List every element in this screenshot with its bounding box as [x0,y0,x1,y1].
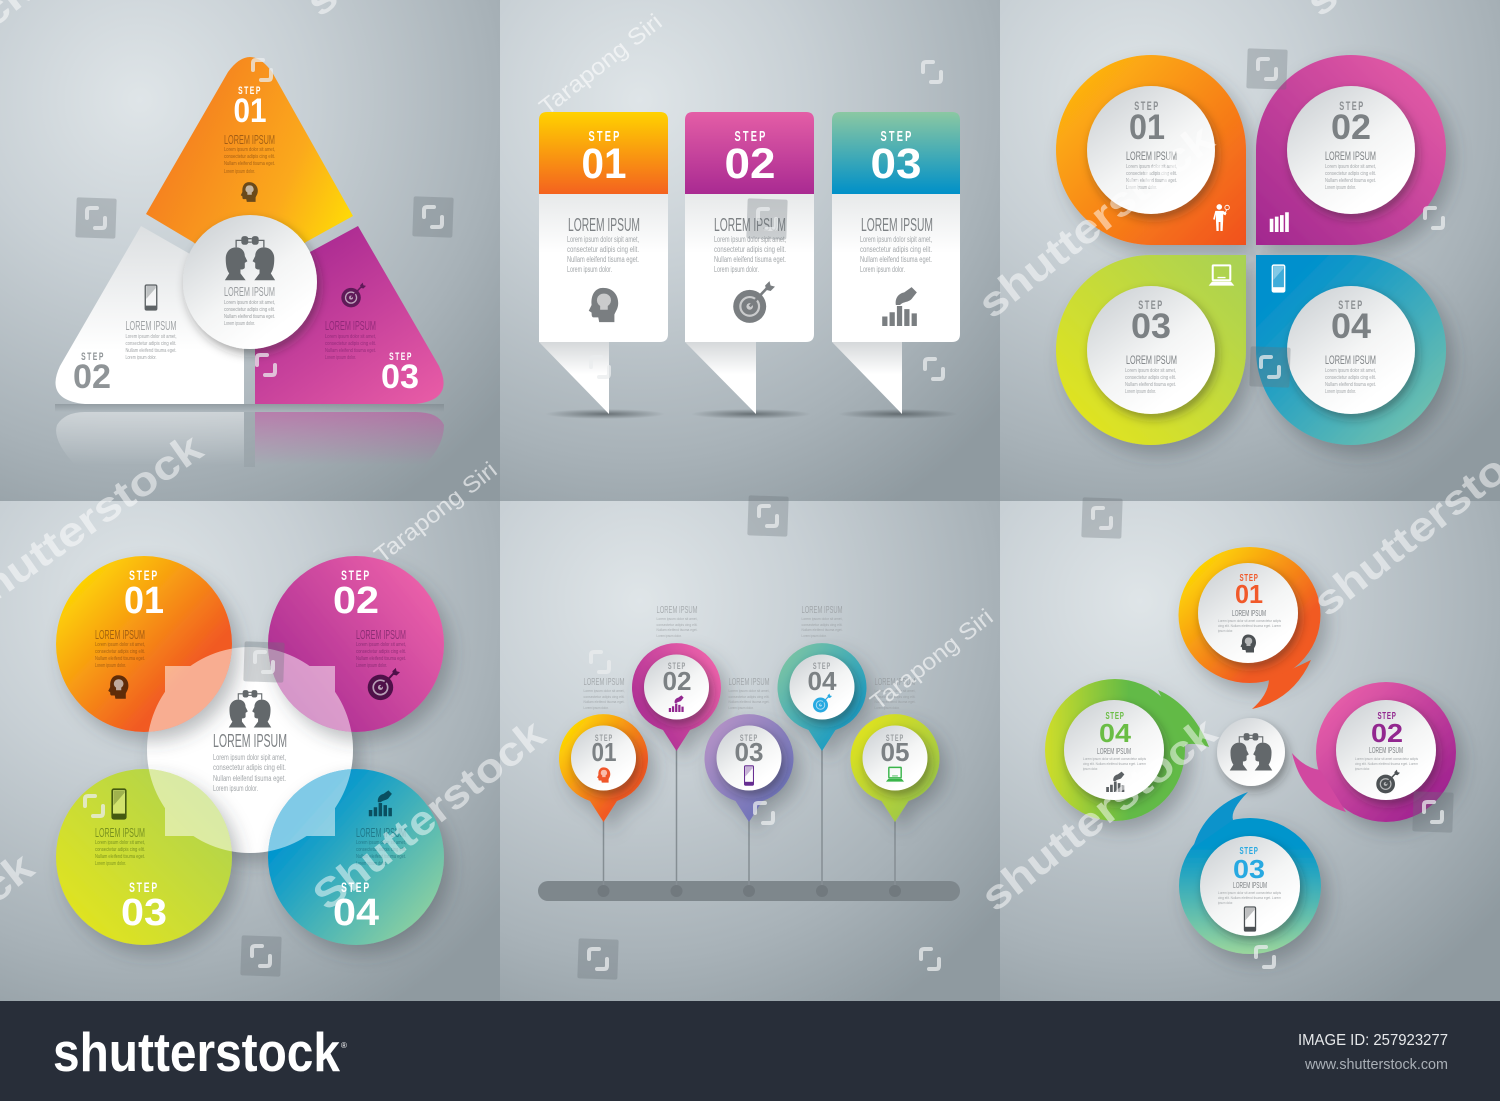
icon: head with bulb [241,182,258,202]
teardrop 01: STEP [1134,100,1160,114]
card 2: consectetur adipis cing elit. [714,245,786,254]
pin 03: Lorem ipsum dolor. [728,705,754,710]
pin 05: Lorem ipsum dolor sit amet, [874,688,916,693]
pin 01: Lorem ipsum dolor. [584,705,608,710]
step 01 label: 01 [234,92,266,130]
watermarks: Tarapong Siri [534,8,667,120]
step 01 text: LOREM IPSUM [95,627,145,642]
center text: Nullam eleifend tisuma eget. [224,314,275,320]
center icon and text: Nullam eleifend tisuma eget. [213,774,286,783]
card 2 [685,112,814,419]
pin 02: STEP [668,661,686,671]
step 03 text: Lorem ipsum dolor sit amet, [325,334,376,340]
step 03 text: Nullam eleifend tisuma eget. [95,854,145,860]
step 01 text: Lorem ipsum dolor sit amet, [224,147,275,153]
card 2: Lorem ipsum dolor sipit amet, [714,235,786,244]
pin 02: Nullam eleifend tisuma eget. [656,627,698,632]
center circle with heads icon [1217,718,1285,786]
bubble 03 [1179,792,1321,954]
step 01 text: 01 [124,580,164,622]
step 02 text: 02 [333,580,379,622]
teardrop 03: 03 [1131,307,1171,346]
step 04 text [333,790,406,934]
step 01 label: STEP [238,84,262,96]
pin 04 [778,605,866,751]
website: www.shutterstock.com [1304,1057,1448,1073]
teardrop 02: Lorem ipsum dolor. [1325,185,1356,191]
translucent overlap [147,647,353,853]
step 02 text: STEP [341,568,371,584]
pin 05: LOREM IPSUM [874,677,916,688]
pin 04: STEP [813,661,831,671]
pin 02: consectetur adipis cing elit. [656,622,698,627]
step 01 text [224,132,275,175]
bubble 03: STEP [1239,844,1259,856]
pin 04: consectetur adipis cing elit. [802,622,842,627]
teardrop 04: 04 [1331,307,1372,346]
step 04 text: Lorem ipsum dolor. [356,861,387,867]
step 01 text: Nullam eleifend tisuma eget. [224,161,275,167]
pin 05: STEP [886,733,904,743]
pin 04: Lorem ipsum dolor. [802,633,826,638]
step 04 text: Lorem ipsum dolor sit amet, [356,840,406,846]
teardrop 02: Nullam eleifend tisuma eget. [1325,178,1376,184]
card 1: Lorem ipsum dolor sipit amet, [567,235,639,244]
teardrop 02: 02 [1331,108,1371,147]
pin 03: STEP [740,733,758,743]
bubble 03: LOREM IPSUM [1233,880,1267,890]
step 01 text: consectetur adipis cing elit. [95,649,145,655]
card 3: 03 [870,140,922,188]
step 01 text: Lorem ipsum dolor sit amet, [95,642,145,648]
panel: triangle infographic [55,57,444,467]
pin 02 [632,605,721,751]
card 1: consectetur adipis cing elit. [567,245,639,254]
teardrop 01: consectetur adipis cing elit. [1126,171,1177,177]
panel: banner cards [539,112,960,419]
bubble 02 [1292,682,1456,822]
pin 02: Lorem ipsum dolor. [656,633,682,638]
teardrop 04: Nullam eleifend tisuma eget. [1325,382,1376,388]
pin 04: 04 [808,666,837,696]
pin 05: 05 [880,737,910,767]
bubble 03: 03 [1233,854,1265,884]
bubble 04: 04 [1099,718,1132,748]
bubble 01 [1178,547,1320,709]
pin 02: LOREM IPSUM [656,605,698,616]
watermarks: shutterstock [969,115,1222,327]
pin 05: consectetur adipis cing elit. [874,694,916,699]
bubble 04: Lorem ipsum dolor sit amet consectetur adipis [1083,757,1146,761]
center text [224,284,275,327]
step 02 text: Nullam eleifend tisuma eget. [126,348,176,354]
card 3: LOREM IPSUM [861,215,933,235]
watermarks: Tarapong Siri [369,456,502,568]
step 04 text: consectetur adipis cing elit. [356,847,406,853]
bubble 04 [1045,679,1209,821]
bubble 02: Lorem ipsum dolor sit amet consectetur adipis [1355,757,1418,761]
card 1 [539,112,668,419]
circle 04 [268,769,444,945]
card 3 [832,112,960,419]
image id: IMAGE ID: 257923277 [1298,1032,1448,1049]
registered mark: ® [341,1041,347,1050]
step 03 text: consectetur adipis cing elit. [95,847,145,853]
step 02 text: LOREM IPSUM [356,627,406,642]
bubble 02: ipsum dolor. [1355,767,1370,771]
pin 01: Nullam eleifend tisuma eget. [584,699,624,704]
pin 05: Lorem ipsum dolor. [874,705,900,710]
step 03 text [95,789,167,934]
step 01 text: Lorem ipsum dolor. [224,169,255,175]
card 2: LOREM IPSUM [714,215,786,235]
center circle [183,215,317,349]
timeline bar [538,748,960,901]
step 04 text: LOREM IPSUM [356,825,406,840]
step 01 text [95,568,164,699]
center icon and text: Lorem ipsum dolor. [213,784,258,793]
teardrop 02: consectetur adipis cing elit. [1325,171,1376,177]
pin 01 [559,677,648,822]
center text: Lorem ipsum dolor sit amet, [224,300,275,306]
pin 03: LOREM IPSUM [728,677,770,688]
step 03 label: 03 [381,358,419,396]
panel: overlapping circles [56,556,444,945]
step 03 text: Nullam eleifend tisuma eget. [325,348,376,354]
card 2: STEP [735,128,767,145]
card 2: Nullam eleifend tisuma eget. [714,255,786,264]
teardrop 02: STEP [1339,100,1365,114]
step 02 label: 02 [73,358,111,396]
pin 03: Lorem ipsum dolor sit amet, [728,688,770,693]
card 1: LOREM IPSUM [568,215,640,235]
teardrop 01: Lorem ipsum dolor sit amet, [1126,164,1177,170]
pin 02: Lorem ipsum dolor sit amet, [656,616,698,621]
panel: teardrops [1056,55,1446,445]
bubble 03: Lorem ipsum dolor sit amet consectetur adipis [1218,891,1281,895]
pin 02: 02 [662,666,692,696]
step 03 text: Lorem ipsum dolor sit amet, [95,840,145,846]
panel: pin timeline [538,605,960,901]
card 2: 02 [724,140,776,188]
teardrop 03: STEP [1138,299,1164,313]
pin 04: LOREM IPSUM [802,605,842,616]
step 03 text: STEP [129,880,159,896]
step 02 text: Lorem ipsum dolor. [126,355,156,361]
teardrop 02: LOREM IPSUM [1325,149,1376,163]
teardrop 04: LOREM IPSUM [1325,353,1376,367]
card 3: consectetur adipis cing elit. [860,245,932,254]
bubble 01: 01 [1235,579,1263,609]
teardrop 04: consectetur adipis cing elit. [1325,375,1376,381]
bubble 03: cing elit. Nullam eleifend tisuma eget. Lorem [1218,896,1281,900]
footer logo: shutterstock [53,1021,340,1083]
step 02 text: Nullam eleifend tisuma eget. [356,656,406,662]
pin 03: 03 [734,737,764,767]
pin 03 [704,677,794,822]
step 03 text: consectetur adipis cing elit. [325,341,376,347]
card 1: Nullam eleifend tisuma eget. [567,255,639,264]
pin 04: Nullam eleifend tisuma eget. [802,627,842,632]
step 03 text [325,318,376,361]
teardrop 03: Lorem ipsum dolor sit amet, [1125,368,1176,374]
bubble 02: cing elit. Nullam eleifend tisuma eget. Lorem [1355,762,1418,766]
watermarks: Shutterstock [304,710,553,919]
teardrop 04: Lorem ipsum dolor sit amet, [1325,368,1376,374]
teardrop 02 [1256,55,1446,245]
panel: speech bubbles [1045,547,1456,954]
icon: phone [145,285,157,310]
teardrop 04: Lorem ipsum dolor. [1325,389,1356,395]
center icon and text [213,690,287,793]
pin 03: consectetur adipis cing elit. [728,694,770,699]
step 02 text: Lorem ipsum dolor sit amet, [126,334,176,340]
step 04 text: STEP [341,880,371,896]
pin 05 [850,677,940,822]
circle 02 [268,556,444,732]
triangle segment: orange [146,57,353,290]
center text: LOREM IPSUM [224,284,275,299]
bubble 03: ipsum dolor. [1218,901,1233,905]
teardrop 03: LOREM IPSUM [1126,353,1177,367]
step 02 text: Lorem ipsum dolor. [356,663,387,669]
card 3: Nullam eleifend tisuma eget. [860,255,932,264]
card 3: Lorem ipsum dolor. [860,265,905,274]
bubble 02: 02 [1371,718,1403,748]
bubble 01: cing elit. Nullam eleifend tisuma eget. Lorem [1218,624,1281,628]
bubble 02: STEP [1377,709,1397,721]
triangle segment: magenta [255,226,444,404]
step 03 text: LOREM IPSUM [325,318,376,333]
step 02 text: consectetur adipis cing elit. [356,649,406,655]
center text: consectetur adipis cing elit. [224,307,275,313]
watermarks: Tarapong Siri [865,603,998,715]
teardrop 04 [1256,255,1446,445]
triangle reflection [55,404,444,467]
step 04 text: 04 [333,892,379,934]
step 02 text: consectetur adipis cing elit. [126,341,176,347]
teardrop 01 [1056,55,1246,245]
step 02 text [333,568,406,700]
step 02 text: LOREM IPSUM [126,318,176,333]
pin 03: Nullam eleifend tisuma eget. [728,699,770,704]
step 04 text: Nullam eleifend tisuma eget. [356,854,406,860]
pin 01: Lorem ipsum dolor sit amet, [584,688,624,693]
center icon and text: LOREM IPSUM [213,731,287,751]
teardrop 03: consectetur adipis cing elit. [1125,375,1176,381]
step 02 text: Lorem ipsum dolor sit amet, [356,642,406,648]
pin 01: consectetur adipis cing elit. [584,694,624,699]
pin 01: LOREM IPSUM [584,677,624,688]
teardrop 04: STEP [1338,299,1364,313]
circle 03 [56,769,232,945]
center text: Lorem ipsum dolor. [224,321,255,327]
pin 04: Lorem ipsum dolor sit amet, [802,616,842,621]
bubble 04: cing elit. Nullam eleifend tisuma eget. Lorem [1083,762,1146,766]
bubble 04: LOREM IPSUM [1097,746,1131,756]
pin 01: STEP [595,733,613,743]
bubble 01: Lorem ipsum dolor sit amet consectetur adipis [1218,619,1281,623]
teardrop 01: Lorem ipsum dolor. [1126,185,1157,191]
teardrop 03 [1056,255,1246,445]
footer bar [0,1001,1500,1101]
triangle segment: white [56,226,244,404]
step 01 text: Lorem ipsum dolor. [95,663,126,669]
bubble 01: LOREM IPSUM [1232,608,1266,618]
step 01 text: LOREM IPSUM [224,132,275,147]
teardrop 01: Nullam eleifend tisuma eget. [1126,178,1177,184]
center icon and text: consectetur adipis cing elit. [213,763,286,772]
step 03 label: STEP [389,350,413,362]
teardrop 03: Lorem ipsum dolor. [1125,389,1156,395]
step 01 text: consectetur adipis cing elit. [224,154,275,160]
card 1: 01 [582,140,626,188]
pin 05: Nullam eleifend tisuma eget. [874,699,916,704]
icon: two heads with plug [225,236,275,280]
teardrop 01: 01 [1129,108,1165,147]
bubble 04: ipsum dolor. [1083,767,1098,771]
bubble 02: LOREM IPSUM [1369,745,1403,755]
bubble 01: ipsum dolor. [1218,629,1233,633]
step 02 label: STEP [81,350,105,362]
card 1: STEP [589,128,621,145]
step 03 text: LOREM IPSUM [95,825,145,840]
step 03 text: Lorem ipsum dolor. [325,355,356,361]
watermarks: shutterstock [972,708,1225,920]
step 01 text: STEP [129,568,159,584]
teardrop 03: Nullam eleifend tisuma eget. [1125,382,1176,388]
pin 01: 01 [592,737,616,767]
icon: target [341,283,366,307]
step 02 text [126,318,176,361]
bubble 01: STEP [1239,571,1259,583]
card 3: STEP [881,128,913,145]
step 03 text: Lorem ipsum dolor. [95,861,126,867]
bubble 04: STEP [1105,709,1125,721]
card 1: Lorem ipsum dolor. [567,265,612,274]
center icon and text: Lorem ipsum dolor sipit amet, [213,753,286,762]
card 2: Lorem ipsum dolor. [714,265,759,274]
circle 01 [56,556,232,732]
central white shape [147,647,353,853]
step 01 text: Nullam eleifend tisuma eget. [95,656,145,662]
teardrop 01: LOREM IPSUM [1126,149,1177,163]
teardrop 02: Lorem ipsum dolor sit amet, [1325,164,1376,170]
step 03 text: 03 [121,892,167,934]
card 3: Lorem ipsum dolor sipit amet, [860,235,932,244]
